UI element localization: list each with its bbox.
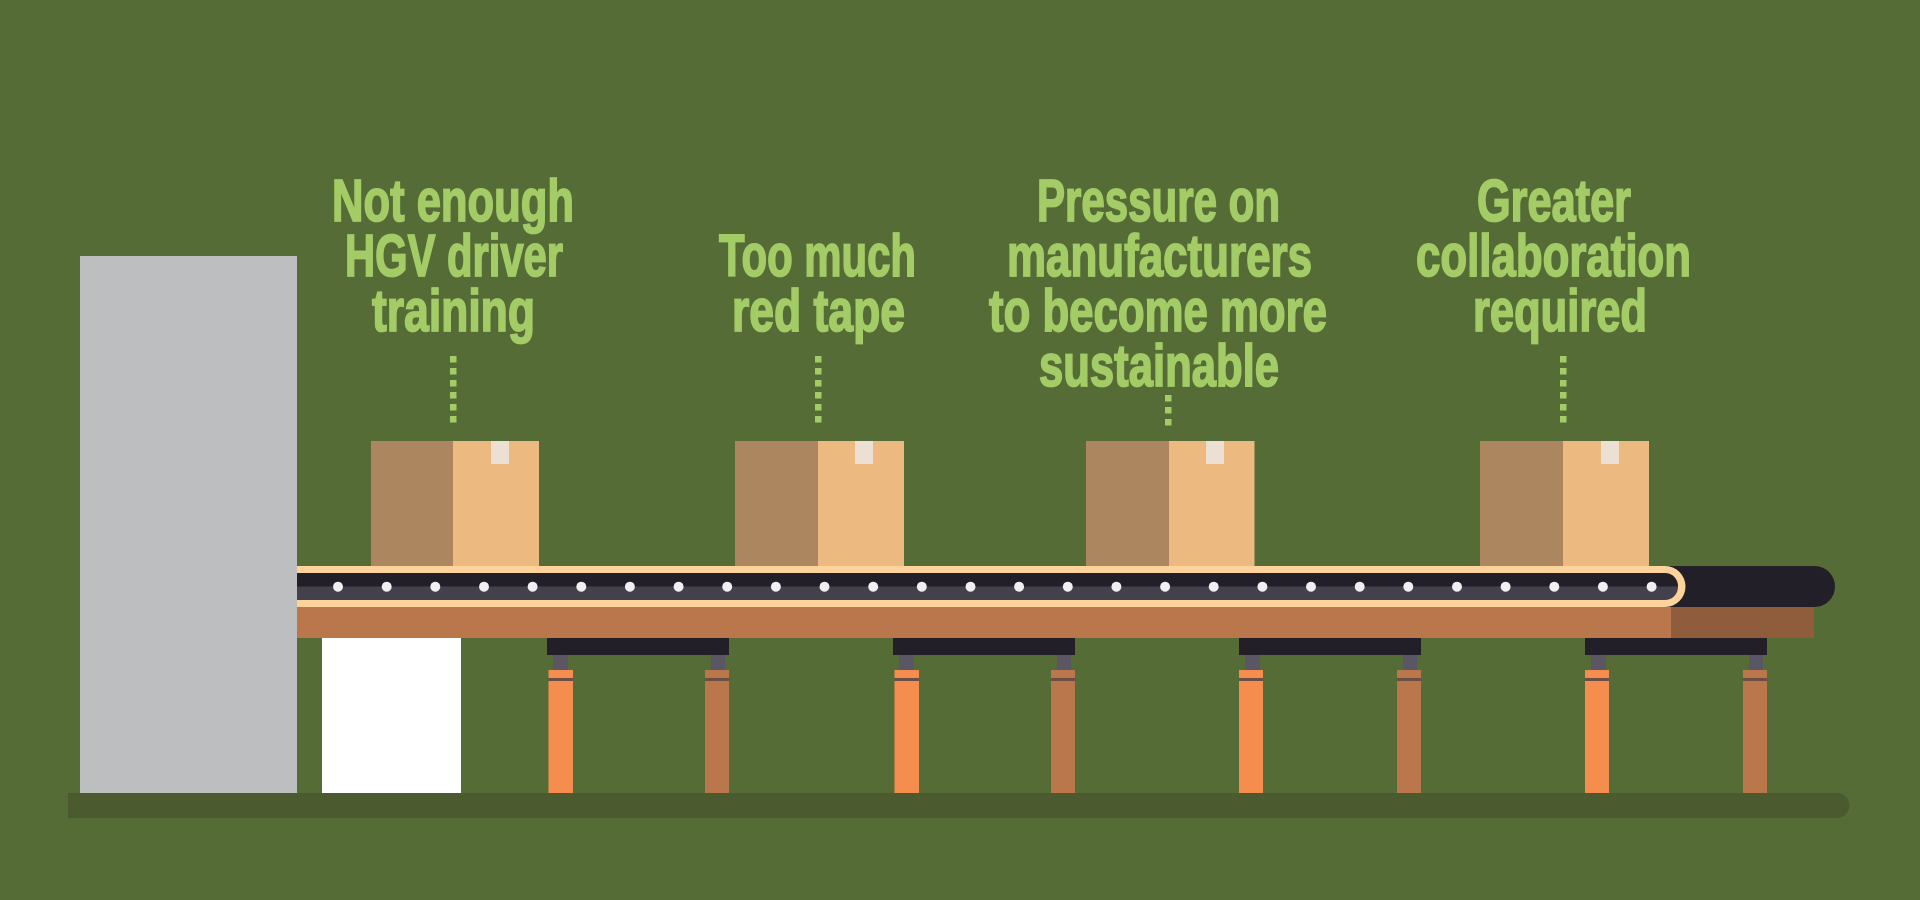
cardboard box 3 — [1086, 441, 1254, 566]
ground strip — [68, 793, 1849, 818]
dotted connector 2 — [815, 356, 822, 422]
conveyor belt — [297, 566, 1835, 638]
label: pressure on manufacturers: sustainable — [1039, 333, 1279, 399]
label: pressure on manufacturers: manufacturers — [1007, 223, 1312, 289]
dark roller end — [1640, 566, 1835, 607]
label: not enough HGV driver training: HGV driver — [345, 223, 563, 289]
label: pressure on manufacturers: Pressure on — [1037, 168, 1280, 234]
label: pressure on manufacturers: to become more — [989, 278, 1327, 344]
support frame 2 — [893, 638, 1075, 793]
label: too much red tape — [719, 223, 916, 344]
label: greater collaboration required — [1416, 168, 1691, 344]
label: too much red tape: Too much — [719, 223, 916, 289]
belt bed dark end — [1671, 607, 1814, 638]
dotted connector 3 — [1165, 395, 1172, 426]
label: pressure on manufacturers — [989, 168, 1327, 399]
cardboard box 4 — [1480, 441, 1649, 566]
cardboard box 2 — [735, 441, 904, 566]
grey building block — [80, 256, 297, 793]
support frame 1 — [547, 638, 729, 793]
label: not enough HGV driver training — [332, 168, 574, 344]
belt grey lower — [297, 586, 1678, 600]
belt dark upper — [297, 573, 1678, 587]
support frame 4 — [1585, 638, 1767, 793]
white block under belt — [322, 638, 461, 793]
label: greater collaboration required: Greater — [1477, 168, 1631, 234]
label: greater collaboration required: required — [1473, 278, 1647, 344]
belt cream outline — [297, 566, 1686, 607]
belt rollers — [333, 582, 1657, 592]
dotted connector 4 — [1560, 356, 1566, 422]
cardboard box 1 — [371, 441, 539, 566]
label: greater collaboration required: collaboration — [1416, 223, 1691, 289]
label: not enough HGV driver training: training — [372, 278, 535, 344]
conveyor legs and supports — [547, 638, 1767, 793]
label: not enough HGV driver training: Not enough — [332, 168, 574, 234]
dotted connector 1 — [450, 356, 456, 422]
label: too much red tape: red tape — [732, 278, 905, 344]
belt bed — [297, 607, 1671, 638]
support frame 3 — [1239, 638, 1421, 793]
